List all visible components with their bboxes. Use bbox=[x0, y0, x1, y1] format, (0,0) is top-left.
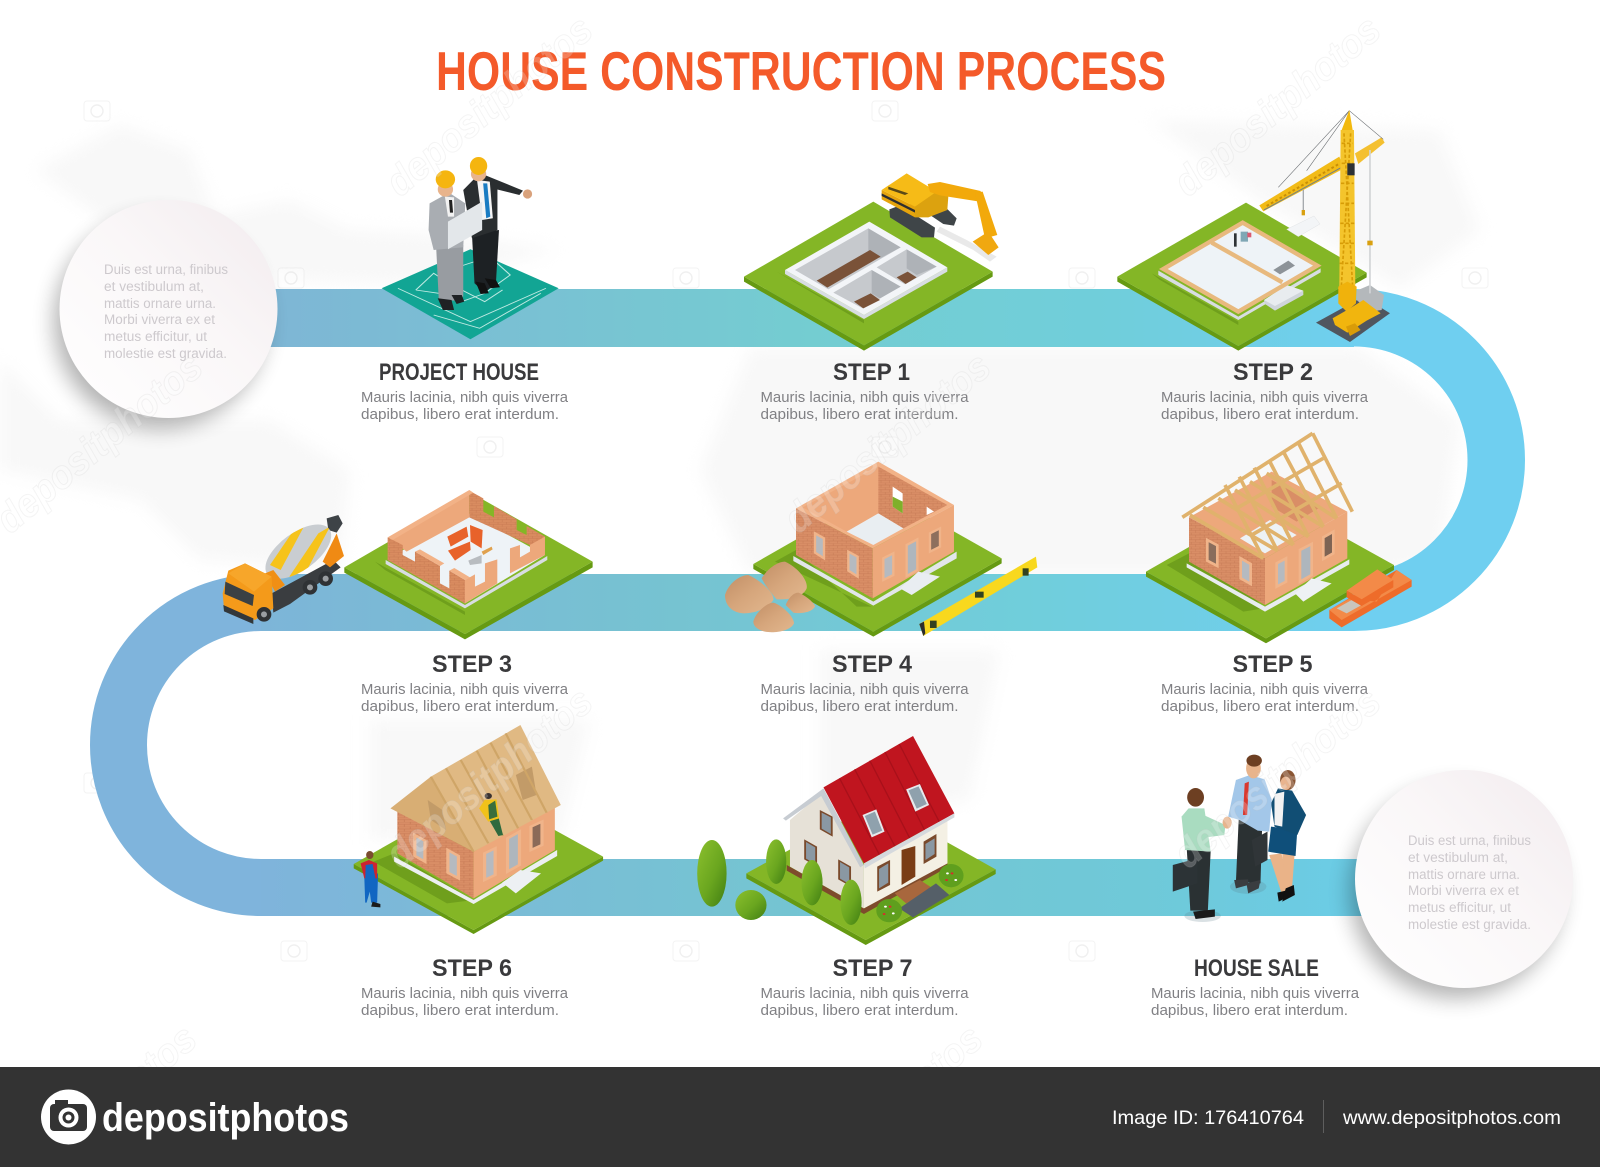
green tile bbox=[354, 857, 603, 934]
label: step 5: Mauris lacinia, nibh quis viverra bbox=[1161, 682, 1369, 698]
circle text bbox=[104, 262, 228, 361]
footer logo text: depositphotos bbox=[102, 1096, 349, 1140]
label: step 5: dapibus, libero erat interdum. bbox=[1161, 699, 1359, 715]
stacked bricks bbox=[1329, 569, 1412, 627]
circle text: Morbi viverra ex et bbox=[1408, 883, 1519, 898]
foundation pit bbox=[785, 222, 947, 319]
label: step 6: Mauris lacinia, nibh quis viverra bbox=[361, 986, 569, 1002]
road: middle band bbox=[261, 574, 1354, 631]
repeating depositphotos watermark: depositphotos bbox=[1166, 7, 1389, 205]
businessman with red tie bbox=[1228, 755, 1272, 893]
circle text: Morbi viverra ex et bbox=[104, 312, 215, 327]
label: step 4: STEP 4 bbox=[832, 651, 913, 678]
green tile bbox=[1146, 565, 1394, 643]
repeating depositphotos watermark: depositphotos bbox=[378, 7, 601, 205]
label: step 3: dapibus, libero erat interdum. bbox=[361, 699, 559, 715]
foreman in blue overalls bbox=[361, 851, 380, 907]
circle text: metus efficitur, ut bbox=[1408, 900, 1511, 915]
circle text: Duis est urna, finibus bbox=[104, 262, 228, 277]
label: step 1 bbox=[760, 359, 969, 423]
roof truss bbox=[1182, 433, 1352, 558]
rolled blueprint held by engineers bbox=[448, 202, 482, 249]
label: step 4: dapibus, libero erat interdum. bbox=[760, 699, 958, 715]
circle text: metus efficitur, ut bbox=[104, 329, 207, 344]
illustration: house sale people bbox=[1173, 755, 1306, 922]
excavator bbox=[882, 173, 999, 262]
label: step 2: STEP 2 bbox=[1233, 359, 1313, 386]
circle text: mattis ornare urna. bbox=[104, 296, 216, 311]
label: step 1: Mauris lacinia, nibh quis viverra bbox=[760, 390, 969, 406]
label: project house: dapibus, libero erat interdum. bbox=[361, 407, 559, 423]
circle text: mattis ornare urna. bbox=[1408, 867, 1520, 882]
label: step 1: STEP 1 bbox=[833, 359, 910, 386]
label: step 4 bbox=[760, 651, 969, 715]
label: step 3: Mauris lacinia, nibh quis viverra bbox=[361, 682, 569, 698]
engineer in black suit bbox=[463, 157, 532, 294]
blueprint tile bbox=[382, 249, 559, 339]
label: project house: PROJECT HOUSE bbox=[379, 359, 539, 386]
green tile bbox=[746, 869, 996, 945]
spirit level bbox=[919, 557, 1037, 636]
info circle: left bbox=[54, 200, 278, 428]
footer divider bbox=[1323, 1100, 1324, 1133]
ground shadows bbox=[1184, 879, 1266, 922]
illustration: step 3 low walls and cement mixer bbox=[223, 490, 593, 639]
faint world map background bbox=[0, 120, 1480, 840]
circle text: Duis est urna, finibus bbox=[1408, 833, 1531, 848]
label: step 7: dapibus, libero erat interdum. bbox=[760, 1003, 958, 1019]
illustration: step 5 roof trusses and bricks bbox=[1146, 433, 1412, 643]
repeating depositphotos watermark: depositphotos bbox=[378, 679, 601, 877]
walls bbox=[1187, 472, 1349, 612]
footer bar bbox=[0, 1067, 1600, 1167]
label: step 5: STEP 5 bbox=[1232, 651, 1312, 678]
label: project house: Mauris lacinia, nibh quis viverra bbox=[361, 390, 569, 406]
label: step 6 bbox=[361, 955, 569, 1019]
illustration: step 1 foundation and excavator bbox=[744, 173, 999, 351]
woman in navy suit bbox=[1268, 770, 1306, 902]
serpentine road path bbox=[118, 289, 1496, 916]
website: www.depositphotos.com bbox=[1342, 1108, 1561, 1129]
green tile bbox=[744, 272, 993, 351]
road: left curve bbox=[118, 602, 261, 888]
road: bottom band bbox=[261, 859, 1391, 916]
green tile bbox=[1117, 273, 1367, 351]
illustration: project house bbox=[382, 157, 559, 339]
green tile bbox=[344, 562, 593, 639]
label: house sale: Mauris lacinia, nibh quis viverra bbox=[1151, 986, 1360, 1002]
concrete slab with timber frame bbox=[1158, 222, 1321, 320]
green tile bbox=[753, 558, 1002, 637]
image id: Image ID: 176410764 bbox=[1112, 1108, 1304, 1129]
label: step 7: Mauris lacinia, nibh quis viverra bbox=[760, 986, 969, 1002]
house walls bbox=[787, 792, 949, 917]
label: step 3 bbox=[361, 651, 569, 715]
wooden roof bbox=[390, 725, 561, 852]
circle text: molestie est gravida. bbox=[104, 346, 227, 361]
label: step 3: STEP 3 bbox=[432, 651, 512, 678]
label: step 7 bbox=[760, 955, 969, 1019]
roofer bbox=[479, 793, 503, 836]
repeating depositphotos watermark: depositphotos bbox=[1166, 679, 1389, 877]
circle text: et vestibulum at, bbox=[104, 279, 204, 294]
repeating depositphotos watermark: depositphotos bbox=[776, 344, 999, 542]
circle text: et vestibulum at, bbox=[1408, 850, 1508, 865]
label: step 7: STEP 7 bbox=[832, 955, 912, 982]
businessman with briefcase bbox=[1173, 788, 1232, 919]
label: step 6: STEP 6 bbox=[432, 955, 512, 982]
label: house sale: HOUSE SALE bbox=[1194, 955, 1319, 982]
conical shrubs on lot bbox=[766, 839, 862, 925]
circle text bbox=[1408, 833, 1531, 932]
brick walls bbox=[394, 805, 557, 904]
label: house sale: dapibus, libero erat interdum. bbox=[1151, 1003, 1348, 1019]
illustration: step 6 roofed brick house bbox=[354, 725, 603, 934]
title: HOUSE CONSTRUCTION PROCESS bbox=[436, 40, 1166, 102]
label: step 5 bbox=[1161, 651, 1369, 715]
label: project house bbox=[361, 359, 569, 423]
flowering bushes bbox=[876, 864, 964, 922]
cement mixer truck bbox=[223, 514, 344, 624]
label: step 1: dapibus, libero erat interdum. bbox=[760, 407, 958, 423]
illustration: step 7 finished house bbox=[697, 736, 996, 945]
red roof bbox=[783, 736, 954, 868]
tower crane bbox=[1259, 110, 1390, 342]
label: step 2: dapibus, libero erat interdum. bbox=[1161, 407, 1359, 423]
circle text: molestie est gravida. bbox=[1408, 917, 1531, 932]
walls with openings bbox=[793, 462, 957, 606]
camera watermarks bbox=[84, 101, 1488, 961]
slab bbox=[386, 556, 547, 608]
icon: camera logo bbox=[41, 1090, 96, 1144]
label: step 2 bbox=[1161, 359, 1369, 423]
engineer in grey suit bbox=[429, 170, 465, 310]
label: step 6: dapibus, libero erat interdum. bbox=[361, 1003, 559, 1019]
road: right curve bbox=[1354, 318, 1496, 602]
label: house sale bbox=[1151, 955, 1360, 1019]
loose shrubs on road bbox=[697, 840, 767, 920]
info circle: right bbox=[1350, 770, 1573, 998]
illustration: step 2 slab and tower crane bbox=[1117, 110, 1390, 351]
stacks of bricks and trowel bbox=[447, 525, 493, 565]
rising brick walls bbox=[388, 490, 545, 603]
illustration: step 4 brick walls, sand and level bbox=[725, 462, 1037, 637]
label: step 4: Mauris lacinia, nibh quis viverra bbox=[760, 682, 969, 698]
road: top band bbox=[262, 289, 1354, 347]
sand piles bbox=[725, 562, 815, 632]
label: step 2: Mauris lacinia, nibh quis viverra bbox=[1161, 390, 1369, 406]
